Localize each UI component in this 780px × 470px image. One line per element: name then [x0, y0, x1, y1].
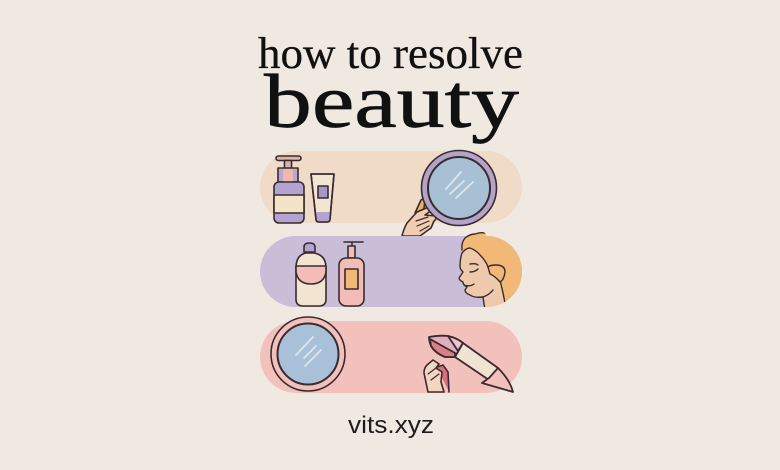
title: how to resolve — [258, 29, 523, 78]
icon: pump bottle pink — [339, 242, 364, 306]
title — [258, 29, 523, 144]
title: beauty — [264, 60, 519, 144]
icon: makeup brush — [429, 336, 513, 392]
icon: woman's face — [458, 232, 522, 307]
icon: tube — [311, 174, 334, 222]
panel: lavender pill — [260, 233, 530, 310]
panel: pink pill — [260, 317, 522, 393]
panel: peach pill — [260, 150, 522, 236]
icon: hand mirror — [402, 150, 496, 236]
icon: pump bottle — [274, 156, 304, 223]
footer url: vits.xyz — [348, 412, 434, 439]
infographic — [258, 36, 522, 438]
icon: hand with sponge — [424, 360, 449, 392]
icon: round bottle — [296, 243, 326, 306]
icon: round mirror — [271, 317, 345, 391]
